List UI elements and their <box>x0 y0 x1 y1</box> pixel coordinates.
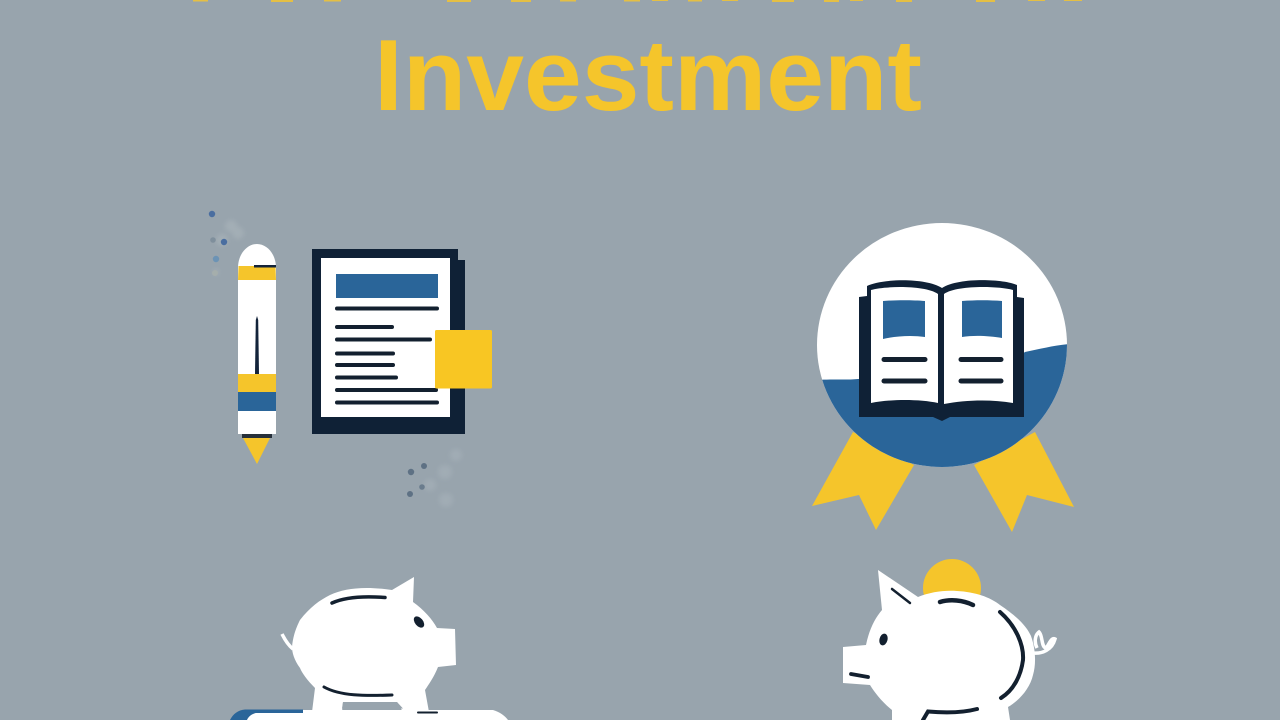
icon: white piggy bank with coin <box>843 559 1055 720</box>
badge circle <box>817 223 1067 467</box>
pig details <box>324 597 437 712</box>
icon: scattered dots bottom <box>407 449 462 507</box>
pig body <box>292 577 456 712</box>
icon: document <box>312 249 492 434</box>
open book <box>859 280 1024 421</box>
pig details <box>851 589 1023 720</box>
icon: scattered dots top left <box>209 211 244 276</box>
title: clipped upper line fragments <box>193 0 1082 2</box>
document header bar <box>336 274 438 298</box>
coin <box>923 559 981 617</box>
icon: book badge <box>810 215 1075 532</box>
badge ribbons <box>812 432 1074 532</box>
pig tail <box>1033 632 1055 653</box>
tray <box>230 710 303 720</box>
book pictures <box>883 300 925 339</box>
pig body <box>843 570 1035 720</box>
book text lines <box>884 360 1001 381</box>
icon: pencil <box>238 244 276 464</box>
document text lines <box>337 308 437 402</box>
icon: white piggy bank on tray <box>230 577 508 720</box>
document yellow note <box>435 330 492 388</box>
pig tail <box>282 634 293 649</box>
title: Investment: Investment <box>374 20 922 132</box>
